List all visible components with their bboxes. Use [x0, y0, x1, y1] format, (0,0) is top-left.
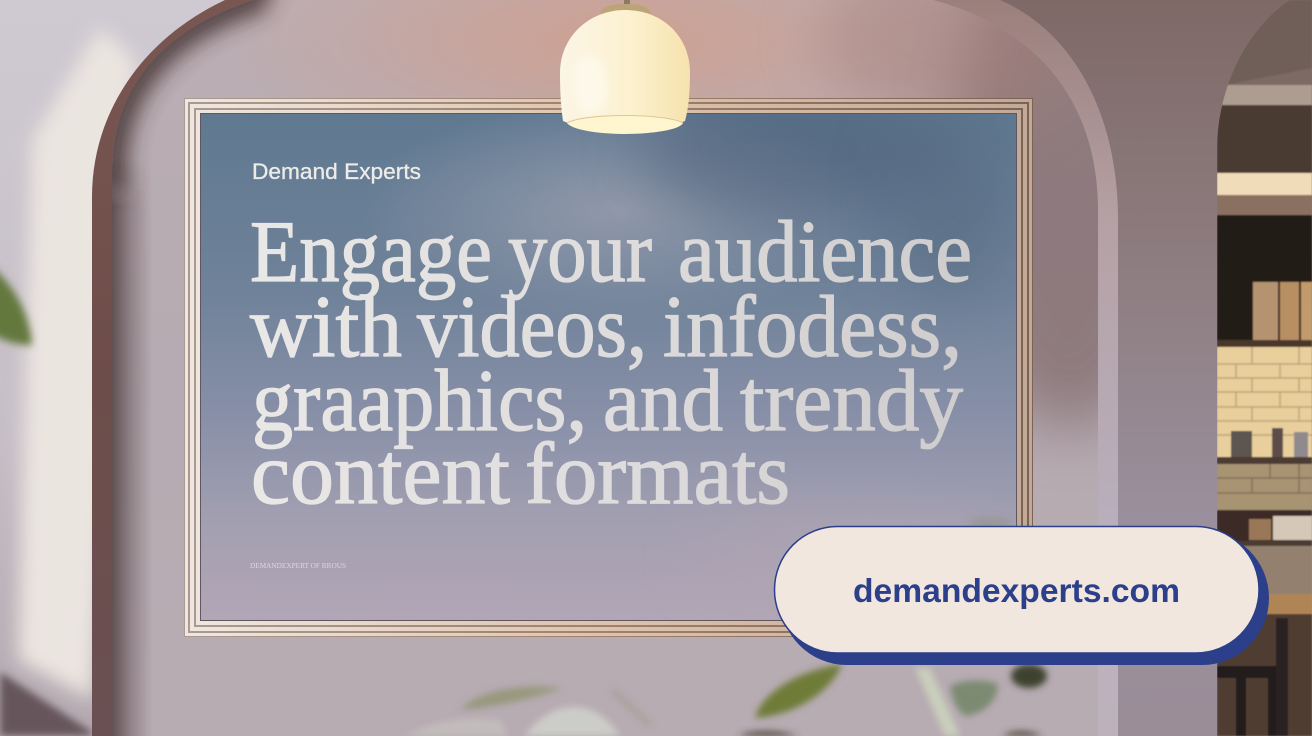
- cafe interior through right archway: [1217, 0, 1312, 736]
- poster headline: trendy: [740, 353, 963, 450]
- left plant leaf blurred: [0, 262, 32, 345]
- callout: website pill: [774, 526, 1269, 665]
- poster headline: with: [250, 279, 402, 376]
- window light on left wall: [18, 28, 135, 700]
- poster fine print: DEMANDEXPERT OF RROUS: [250, 562, 346, 570]
- icon: pendant lamp: [560, 0, 690, 134]
- poster headline: Engage: [250, 204, 492, 301]
- arch inner wall: [112, 0, 1098, 736]
- poster headline: content: [251, 426, 510, 523]
- poster: [201, 80, 1016, 620]
- poster headline: and: [603, 353, 723, 450]
- foreground blurred plant: [405, 518, 1047, 736]
- picture frame: [184, 98, 1033, 637]
- outer wall: [0, 0, 225, 646]
- website address: demandexperts.com: [853, 572, 1180, 609]
- poster headline: your: [508, 204, 652, 301]
- poster headline: [249, 219, 970, 505]
- poster headline: audience: [678, 204, 972, 301]
- poster headline: formats: [525, 426, 790, 523]
- poster brand name: Demand Experts: [252, 159, 421, 184]
- poster headline: infodess,: [663, 279, 962, 376]
- poster headline: videos,: [417, 279, 647, 376]
- arch moulding: [92, 0, 1118, 736]
- poster headline: graaphics,: [252, 353, 587, 450]
